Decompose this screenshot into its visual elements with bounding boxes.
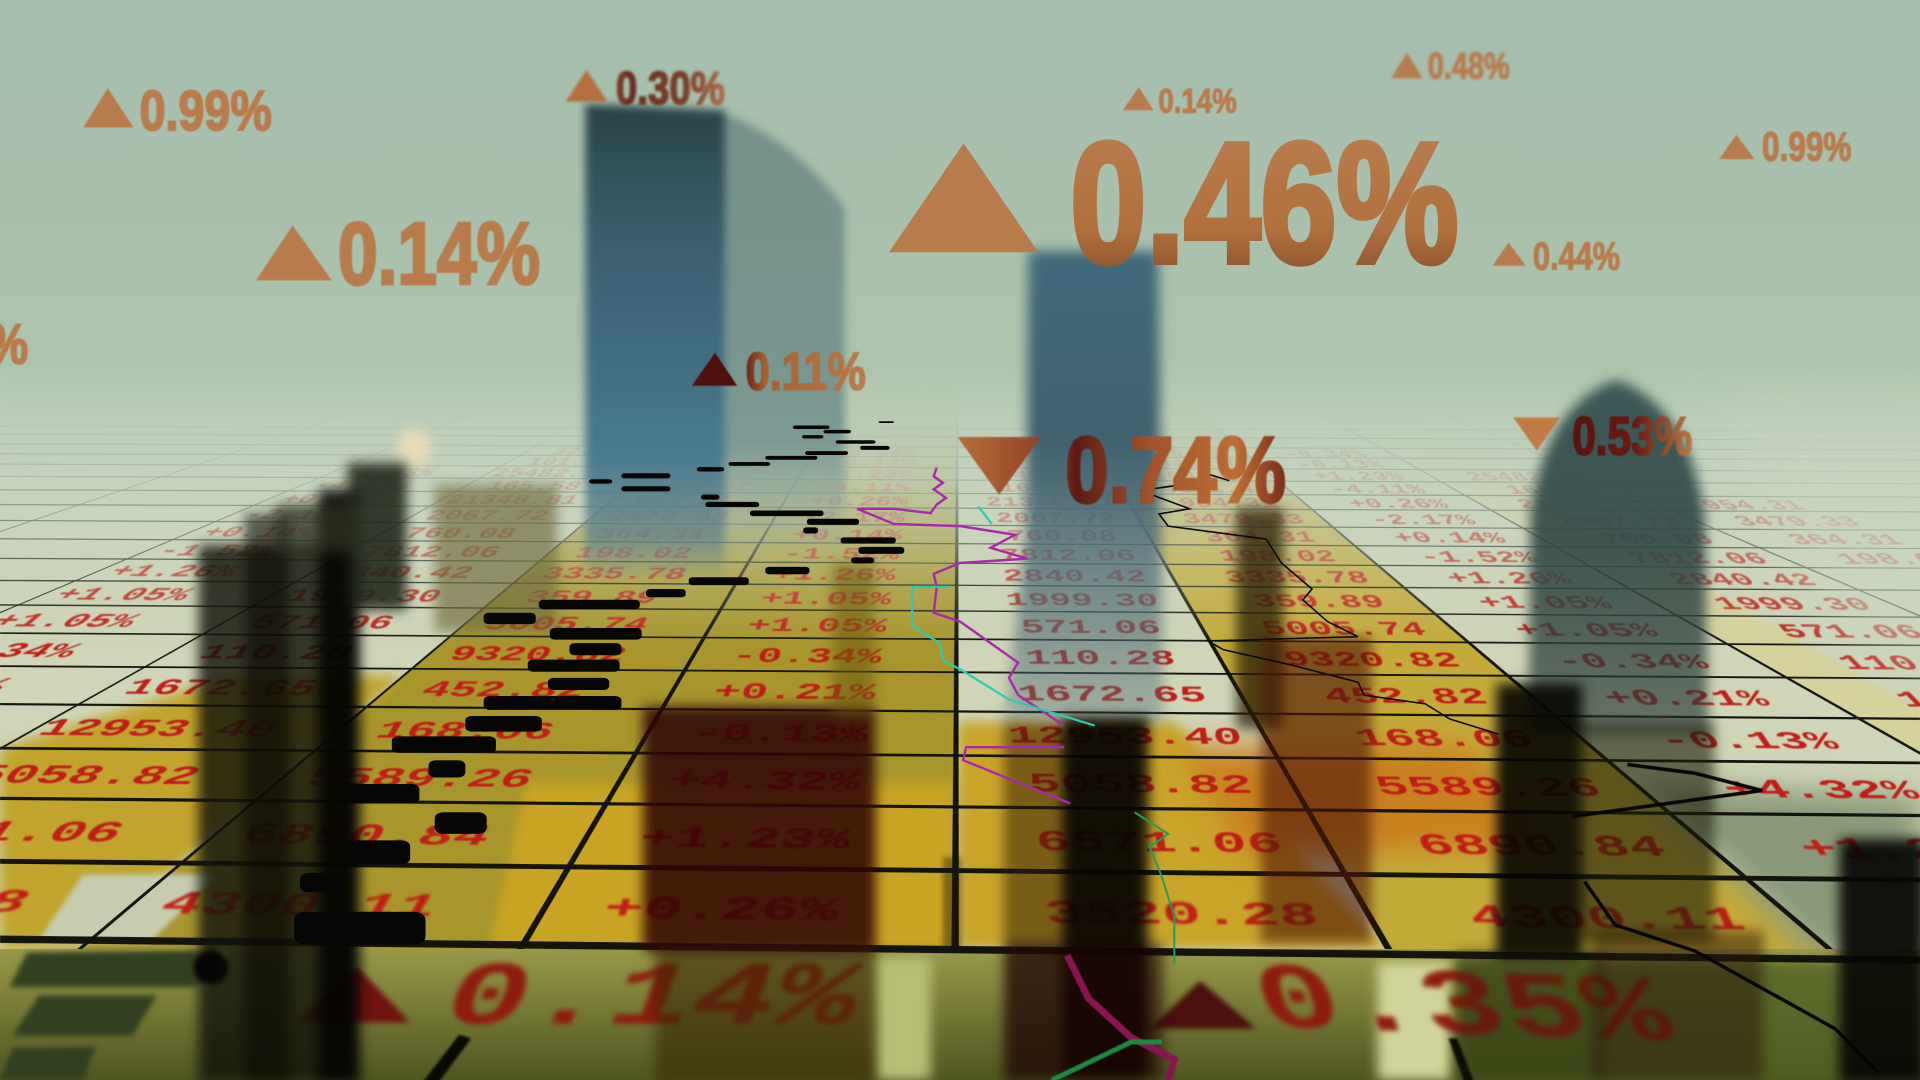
row 2	[0, 760, 1920, 807]
row 3: -0.13%	[689, 720, 873, 749]
row 16: 156.10	[684, 446, 773, 459]
row 4: +0.21%	[710, 679, 880, 706]
row 0	[0, 882, 1753, 940]
big blurred row: up 0.14% and up 0.35%: 0.35%	[1241, 948, 1686, 1069]
row 11: 3479.33	[1728, 514, 1868, 530]
row 9: -1.52%	[1414, 548, 1542, 567]
row 15: 2843.10	[1140, 457, 1245, 471]
row 11	[235, 507, 1868, 531]
line chart: cyan	[912, 507, 1095, 726]
row 8: 3335.78	[1221, 568, 1373, 588]
row 2: 5589.26	[299, 764, 540, 796]
row 12: 21348.81	[1512, 497, 1658, 513]
row 9: 198.02	[570, 544, 696, 563]
row 4	[0, 673, 1920, 715]
row 11: 2067.72	[995, 510, 1118, 527]
row 1	[0, 815, 1920, 868]
row 10: 760.08	[1006, 528, 1118, 546]
row 3: 168.06	[1350, 725, 1538, 754]
percent label: down 0.53%: 0.53%	[1572, 406, 1692, 466]
big blurred row: up 0.14% and up 0.35%	[294, 948, 1686, 1069]
row 12	[273, 491, 1812, 514]
row 14: 25482.50	[1462, 470, 1594, 485]
percent label: up 0.99% top left: 0.99%	[140, 79, 272, 142]
percent label: up 0.99% top left	[83, 79, 272, 142]
row 5: -0.34%	[729, 644, 885, 669]
row 8: +1.26%	[100, 562, 246, 582]
row 14: +1.23%	[335, 466, 442, 480]
line chart: black lower segment	[1572, 765, 1878, 1072]
row 9: 7812.06	[999, 546, 1137, 565]
percent label: up 0.30%: 0.30%	[616, 62, 725, 114]
row 12: 954.31	[630, 493, 736, 509]
brown building left	[397, 429, 557, 632]
percent label: up 0.46% main: 0.46%	[1070, 108, 1458, 299]
percent label: up 0.14% small: 0.14%	[1158, 83, 1237, 121]
row 2: 5589.26	[1370, 772, 1607, 804]
row 6: +1.05%	[744, 615, 890, 638]
row 10: 760.08	[1594, 530, 1720, 548]
row 1: 6571.06	[1033, 825, 1285, 861]
row 4: +0.21%	[1597, 686, 1777, 713]
row 11: 2067.72	[1551, 513, 1688, 530]
row 16	[547, 445, 1371, 461]
row 11: 3479.33	[603, 509, 732, 526]
row 13: -4.11%	[1326, 483, 1429, 497]
table of prices and percent changes	[0, 445, 1920, 940]
row 8: +1.26%	[770, 566, 899, 586]
row 10: 364.31	[1781, 532, 1911, 549]
percent label: up 0.11%	[692, 342, 866, 401]
row 0: 4300.11	[1462, 899, 1752, 940]
row 13	[306, 478, 1608, 498]
row 7	[45, 584, 1880, 616]
blurred foreground candles	[0, 950, 230, 1080]
row 4: 1672.65	[116, 676, 325, 702]
row 4: 452.82	[1319, 684, 1492, 710]
row 5: 9320.82	[443, 643, 631, 668]
percent label: down 0.53%	[1513, 406, 1692, 466]
row 5: 110.28	[1024, 647, 1177, 671]
row 7: +1.05%	[45, 584, 201, 606]
row 16: -0.34%	[833, 447, 918, 459]
row 10: 760.08	[399, 525, 522, 543]
row 7: +1.05%	[1473, 593, 1619, 614]
line chart: magenta	[857, 468, 1070, 804]
row 8: 2840.42	[321, 563, 479, 583]
row 6: 571.06	[244, 612, 401, 634]
row 6: +1.05%	[1509, 619, 1665, 642]
row 12: 954.31	[1176, 495, 1281, 511]
row 14: 25482.50	[982, 468, 1103, 483]
percent label: up 0.99% right	[1719, 123, 1851, 169]
row 13: 4621.47	[1158, 482, 1273, 497]
row 1: 6890.84	[1411, 830, 1672, 865]
row 10: +0.14%	[193, 524, 324, 542]
row 12: 954.31	[1696, 498, 1812, 514]
row 6: 5005.74	[1258, 618, 1430, 641]
row 9: -1.52%	[781, 545, 902, 564]
row 14: 25482.50	[488, 467, 617, 481]
row 12: +0.26%	[1344, 496, 1453, 512]
row 0: +0.26%	[599, 891, 845, 930]
row 1: +1.23%	[635, 822, 855, 857]
row 16: 156.10	[1140, 448, 1227, 461]
row 7: 359.89	[521, 587, 663, 608]
row 5: -0.34%	[1549, 650, 1716, 675]
percent label: up 0.11%: 0.11%	[746, 342, 866, 401]
row 10: +0.14%	[791, 527, 905, 545]
row 3: 12953.40	[1006, 722, 1245, 752]
row 4: 452.82	[415, 678, 592, 704]
row 13: -4.11%	[306, 478, 417, 493]
row 0: 3520.28	[1042, 895, 1322, 935]
line chart: black	[1141, 474, 1499, 734]
side haze right of the table	[1714, 416, 1920, 686]
row 9: 198.02	[1216, 547, 1340, 566]
row 11: 3479.33	[1180, 511, 1307, 528]
row 9: 7812.06	[1622, 550, 1775, 569]
row 15: 101.99	[995, 457, 1082, 471]
row 8: 2840.42	[1661, 570, 1824, 590]
percent label: up 0.48%: 0.48%	[1428, 45, 1510, 86]
big blurred row: up 0.14% and up 0.35%: 0.14%	[428, 949, 877, 1052]
line chart: green	[1134, 812, 1174, 964]
row 15: -0.13%	[1293, 458, 1388, 472]
row 10: 364.31	[592, 526, 711, 544]
row 8	[100, 561, 1824, 591]
row 13: 4621.47	[638, 480, 755, 495]
row 14	[335, 465, 1594, 485]
percent label: up 0.48%	[1391, 45, 1510, 86]
row 2: 5058.82	[1026, 769, 1255, 801]
row 16: 32.65	[547, 445, 626, 458]
blue tower left	[585, 104, 845, 576]
row 11: -2.17%	[800, 509, 908, 526]
row 6: 5005.74	[478, 614, 653, 636]
row 13: -4.11%	[815, 481, 913, 496]
row 13: 165.58	[481, 479, 585, 494]
row 7: 1999.30	[1004, 590, 1160, 611]
row 5	[0, 639, 1920, 677]
line chart: blurred foreground magenta and green	[1052, 955, 1174, 1080]
row 14: 1042.37	[1149, 468, 1259, 483]
row 15: 2843.10	[666, 456, 773, 469]
percent label: up 0.30%	[566, 62, 725, 114]
row 8: +1.26%	[1442, 570, 1578, 589]
panel: floor colours	[0, 367, 1920, 1080]
row 3: 168.06	[369, 718, 561, 746]
row 12: 21348.81	[985, 495, 1117, 511]
percent label: up 0.44%	[1493, 235, 1620, 278]
row 5: 9320.82	[1280, 649, 1465, 673]
row 4: 1672.65	[1016, 681, 1209, 709]
row 11: -2.17%	[235, 507, 358, 524]
row 0: 4300.11	[152, 886, 447, 926]
percent label: up 0.99% right: 0.99%	[1762, 123, 1851, 169]
row 16: 32.65	[1000, 447, 1071, 460]
row 9: -1.52%	[149, 542, 287, 561]
row 8: 3335.78	[537, 565, 691, 584]
row 10	[193, 524, 1911, 549]
row 7: 1999.30	[279, 586, 447, 608]
percent label: down 0.74%: 0.74%	[1065, 418, 1286, 522]
distance haze over the table	[0, 367, 1920, 649]
row 10: 364.31	[1202, 529, 1319, 547]
row 9: 7812.06	[356, 544, 505, 562]
row 14: +1.23%	[1309, 470, 1409, 484]
row 5: 110.28	[192, 641, 360, 666]
row 6: 571.06	[1019, 617, 1163, 640]
row 8: 2840.42	[1002, 567, 1148, 587]
row 3: 12953.40	[30, 716, 286, 745]
row 15: -0.13%	[828, 456, 917, 470]
row 13: 165.58	[1500, 483, 1608, 498]
percent label: up 0.14% large	[256, 204, 540, 303]
row 11: -2.17%	[1366, 512, 1481, 529]
row 2: +4.32%	[665, 766, 865, 798]
row 3	[30, 715, 1848, 757]
row 12: +0.26%	[808, 494, 910, 510]
row 3: -0.13%	[1652, 728, 1847, 757]
row 15	[523, 455, 1388, 472]
candlestick chart	[294, 421, 904, 944]
row 1: 6890.84	[233, 819, 498, 854]
percent label: up 0.46% main	[889, 108, 1458, 299]
tower right	[1528, 380, 1708, 735]
row 11: 2067.72	[421, 508, 554, 525]
row 13: 165.58	[999, 481, 1094, 496]
row 15: 101.99	[523, 455, 618, 469]
row 10: +0.14%	[1389, 529, 1511, 547]
row 16: -0.34%	[1279, 447, 1371, 461]
row 9	[149, 541, 1920, 570]
row 12: 21348.81	[441, 492, 584, 508]
percent label: down 0.74%	[958, 418, 1286, 522]
percent label: up 0.14% small	[1123, 83, 1237, 121]
dark foreground towers	[198, 463, 1920, 1080]
row 12: +0.26%	[273, 492, 389, 508]
row 7: 359.89	[1249, 591, 1389, 613]
grid lines of the table	[0, 367, 1920, 1080]
row 14: +1.23%	[822, 468, 915, 482]
row 7: +1.05%	[758, 588, 895, 610]
blue tower centre	[1004, 251, 1163, 722]
percent label: up 0.44%: 0.44%	[1533, 235, 1620, 278]
percent label: up 0.14% large: 0.14%	[338, 204, 540, 303]
row 14: 1042.37	[652, 467, 764, 482]
row 7: 1999.30	[1708, 595, 1880, 616]
row 6	[0, 610, 1920, 644]
